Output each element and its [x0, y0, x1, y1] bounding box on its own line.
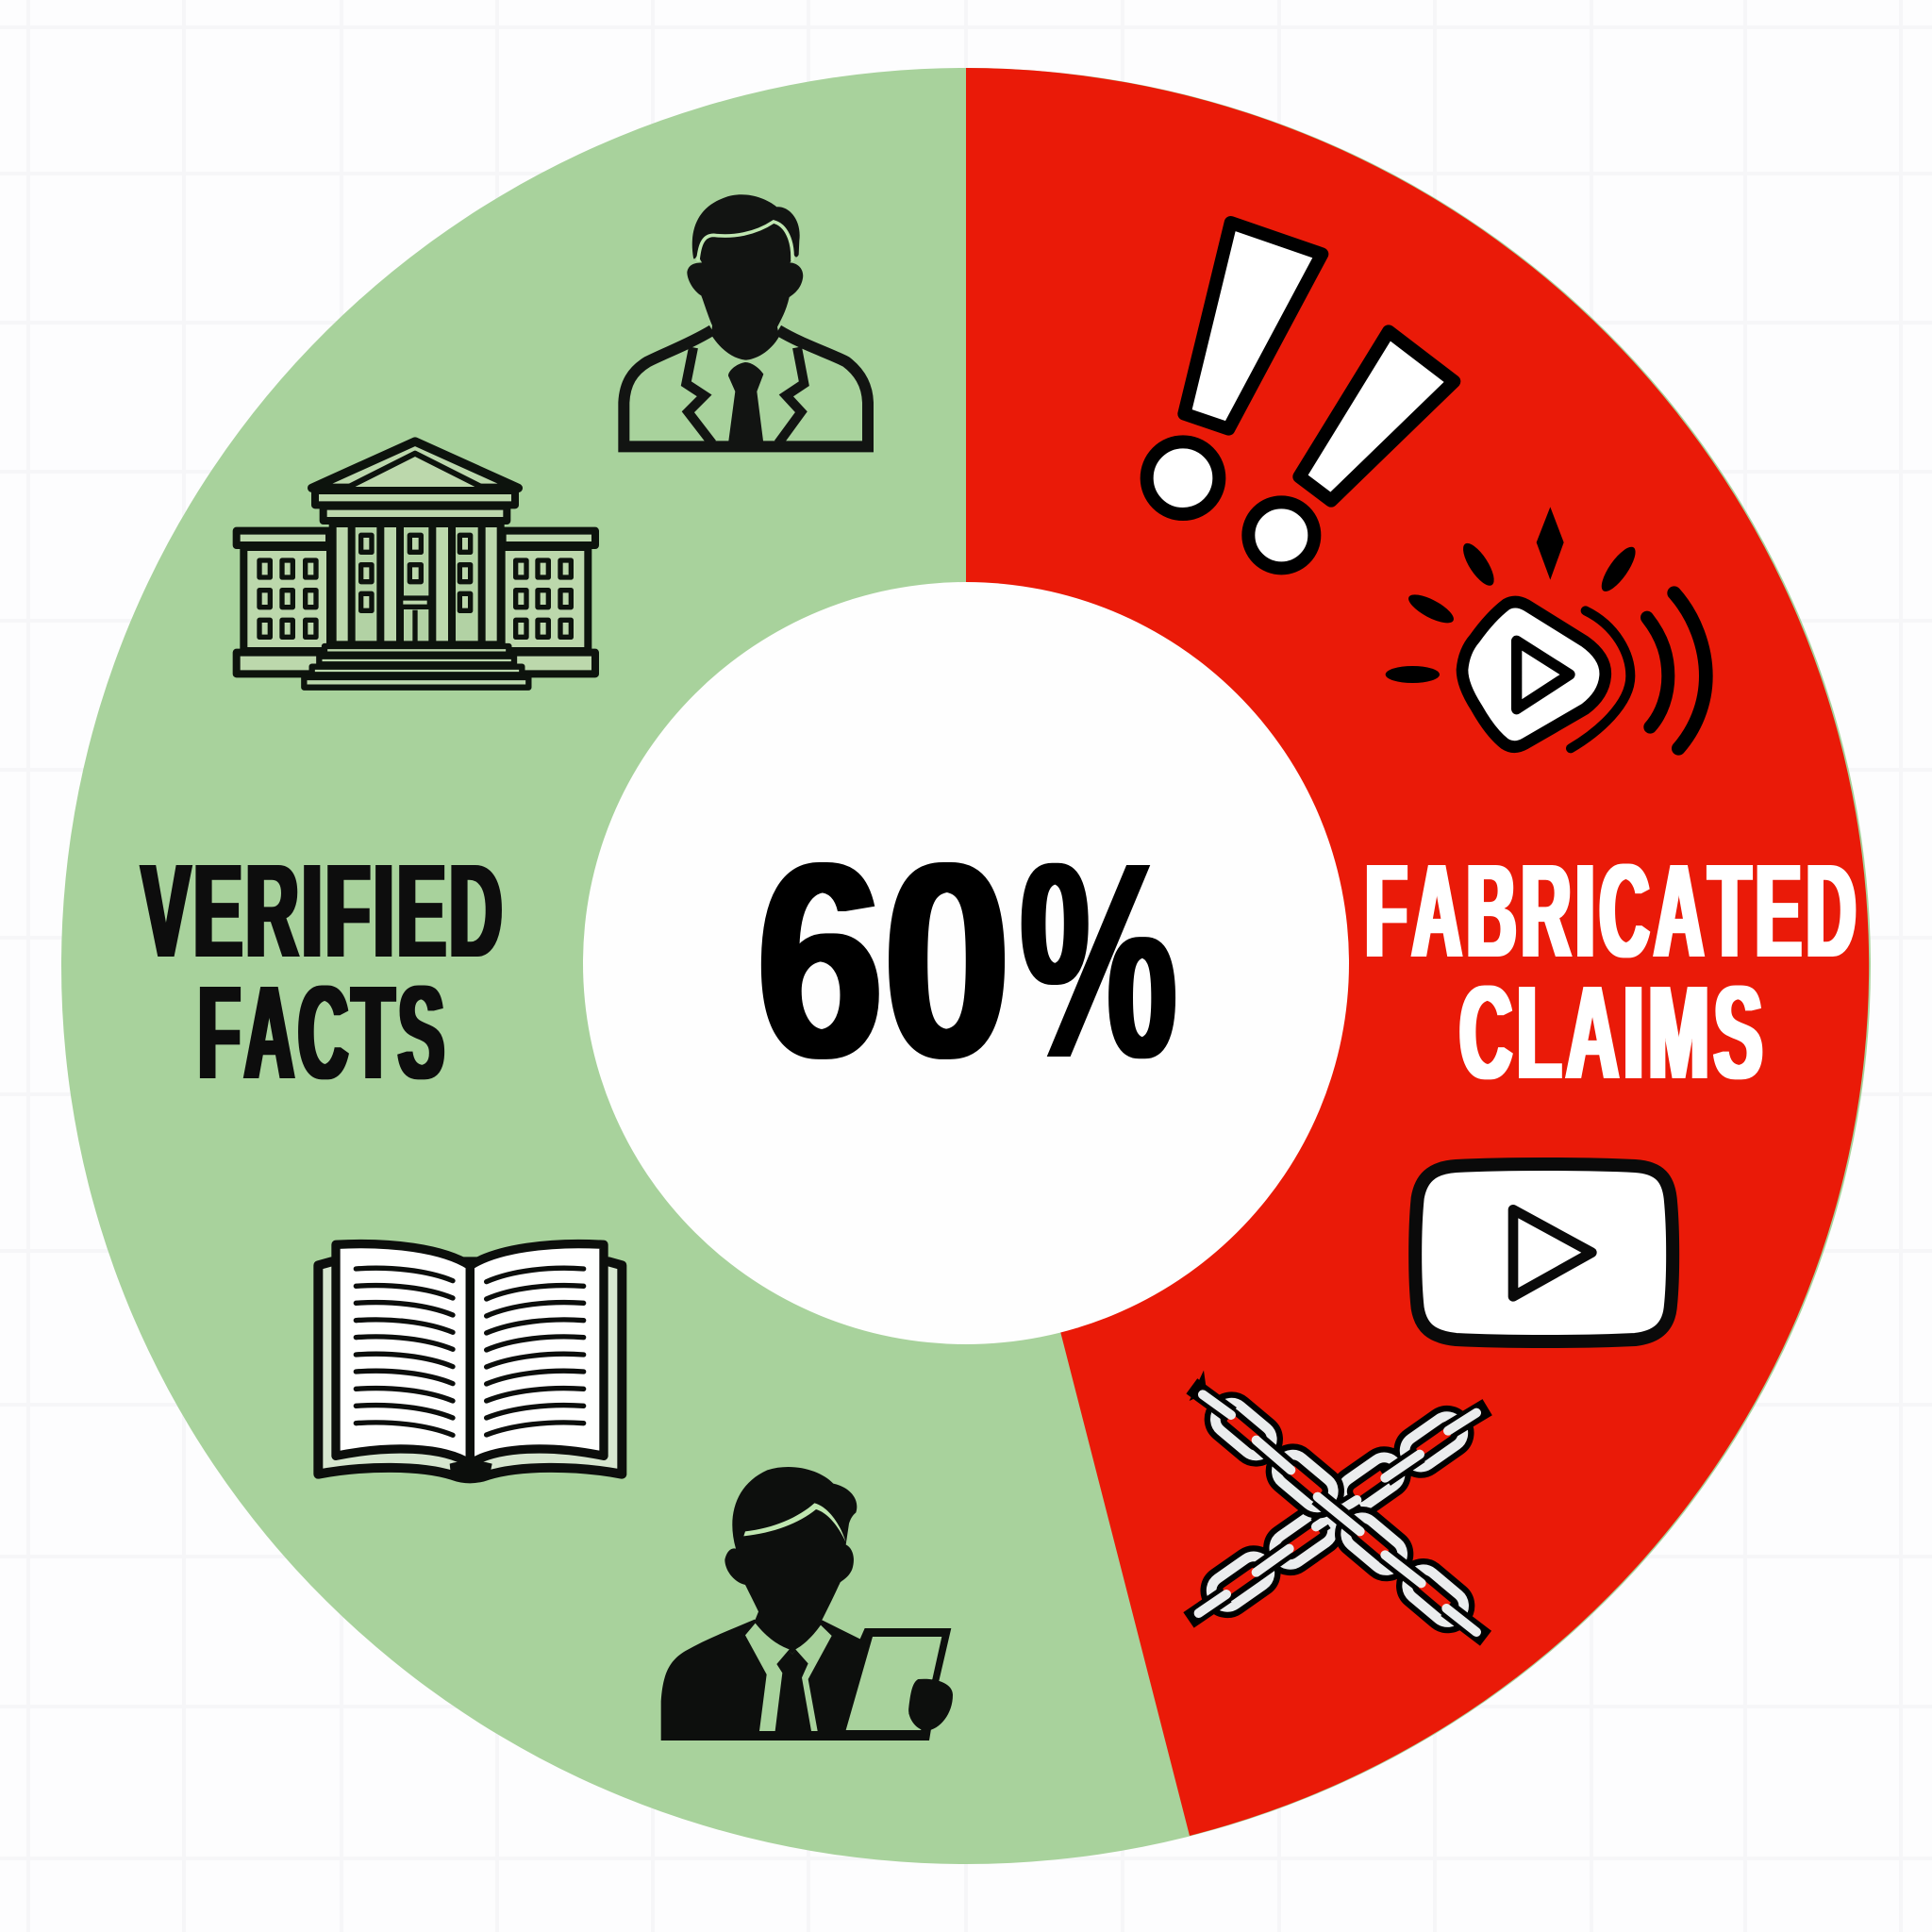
icon: open book — [318, 1244, 622, 1482]
label: fabricated claims: CLAIMS — [1459, 959, 1767, 1108]
icon: shouting video play button — [1386, 507, 1706, 748]
icon: expert with tablet — [661, 1467, 953, 1740]
icon: crossed chains — [1189, 1371, 1488, 1639]
label: fabricated claims — [1365, 836, 1860, 1108]
label: fabricated claims: FABRICATED — [1365, 836, 1860, 985]
icon: exclamation marks — [1147, 223, 1454, 568]
label: verified facts: VERIFIED — [142, 838, 506, 986]
label: verified facts — [142, 838, 506, 1107]
segment: fabricated claims — [966, 68, 1869, 1836]
icon: video player — [1415, 1164, 1673, 1341]
icon: government building — [237, 441, 595, 688]
center value: 60 — [757, 805, 1010, 1116]
center value: % — [1020, 805, 1177, 1116]
label: verified facts: FACTS — [198, 958, 448, 1107]
icon: official in suit — [618, 194, 874, 446]
donut hole — [583, 582, 1349, 1344]
